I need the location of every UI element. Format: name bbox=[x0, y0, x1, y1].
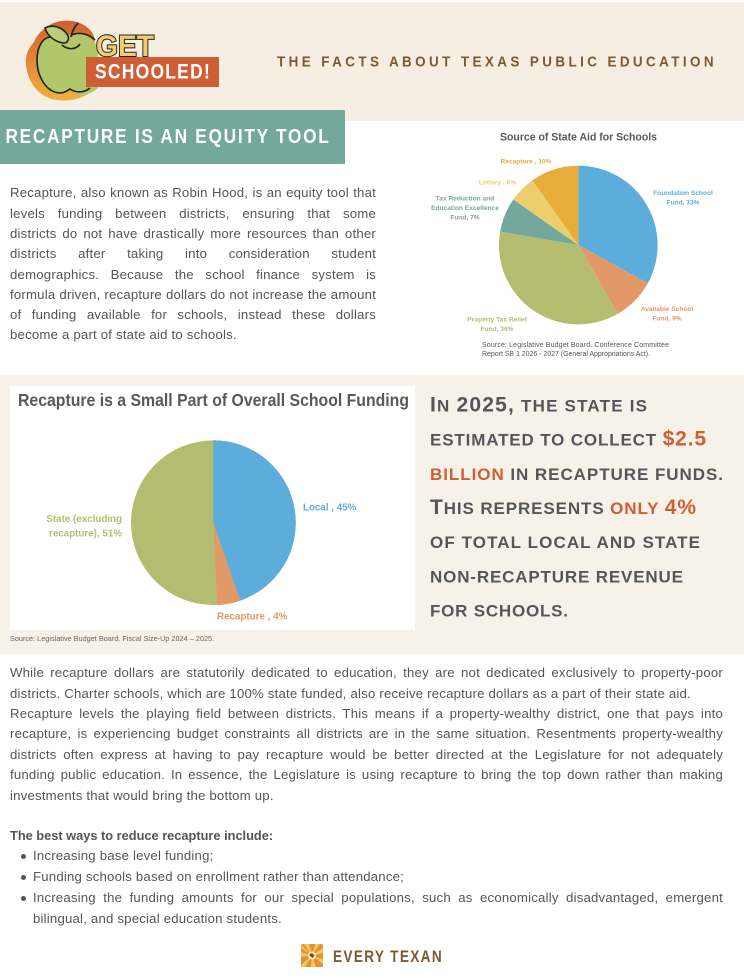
slice labels: Available School bbox=[641, 306, 693, 313]
pie chart: source of state aid bbox=[431, 132, 713, 358]
slice labels: Fund, 7% bbox=[450, 214, 480, 222]
body paragraph: Recapture levels the playing field between districts. This means if a property-wealthy district, one that pays into bbox=[10, 706, 723, 721]
callout: recapture revenue: OF TOTAL LOCAL AND STATE bbox=[430, 533, 700, 552]
callout: recapture revenue: THIS REPRESENTS ONLY 4% bbox=[430, 496, 696, 519]
slice labels: Fund, 9% bbox=[652, 316, 682, 322]
callout: recapture revenue: IN 2025, THE STATE IS bbox=[430, 394, 647, 417]
intro paragraph: levels funding between districts, ensuring that some bbox=[10, 206, 376, 220]
slice labels: Foundation School bbox=[653, 190, 713, 197]
callout: recapture revenue bbox=[430, 394, 723, 621]
intro paragraph: Recapture, also known as Robin Hood, is an equity tool that bbox=[10, 185, 376, 200]
slice labels bbox=[46, 502, 357, 622]
callout: recapture revenue: ESTIMATED TO COLLECT $2.5 bbox=[430, 428, 706, 451]
recommendations list: bilingual, and special education students. bbox=[33, 910, 282, 926]
slice labels: Education Excellence bbox=[431, 205, 499, 212]
slice labels: Recapture , 4% bbox=[217, 612, 288, 622]
panel: funding band bbox=[0, 375, 744, 654]
pie chart: overall school funding bbox=[10, 386, 415, 630]
chart source: Source: Legislative Budget Board. Conference Committee bbox=[482, 342, 669, 349]
recommendations list: Increasing base level funding; bbox=[33, 848, 213, 863]
slice labels: Fund, 36% bbox=[481, 326, 514, 333]
slice labels: Fund, 33% bbox=[667, 200, 700, 206]
slice labels: Property Tax Relief bbox=[467, 316, 528, 324]
body paragraph: districts often express at having to pay recapture would be better directed at the Legislature for not adequately bbox=[10, 746, 723, 762]
header band bbox=[0, 2, 744, 121]
chart source bbox=[482, 342, 669, 358]
body paragraph: investments that would bring the bottom up. bbox=[10, 788, 274, 802]
intro paragraph bbox=[10, 185, 376, 342]
callout: recapture revenue: NON-RECAPTURE REVENUE bbox=[430, 568, 683, 587]
slice labels: Tax Reduction and bbox=[436, 196, 494, 202]
callout: recapture revenue: BILLION IN RECAPTURE FUNDS. bbox=[430, 465, 723, 484]
body paragraph: funding public education. In essence, the Legislature is using recapture to bring the top down rather than making bbox=[10, 767, 723, 782]
slice labels bbox=[431, 158, 713, 333]
slice labels: Recapture , 10% bbox=[501, 158, 552, 166]
intro paragraph: districts do not have drastically more resources than other bbox=[10, 226, 376, 241]
pie slices bbox=[131, 440, 296, 605]
body paragraph bbox=[10, 665, 723, 802]
intro paragraph: of funding available for schools, instead these dollars bbox=[10, 307, 376, 322]
callout: recapture revenue: FOR SCHOOLS. bbox=[430, 602, 568, 621]
slice labels: State (excluding bbox=[46, 514, 122, 525]
slice labels: Lottery , 6% bbox=[479, 180, 516, 186]
recommendations list: Funding schools based on enrollment rather than attendance; bbox=[33, 869, 404, 884]
recommendations list: Increasing the funding amounts for our special populations, such as economically disadvantaged, emergent bbox=[33, 890, 723, 905]
intro paragraph: formula driven, recapture dollars do not increase the amount bbox=[10, 286, 376, 302]
body paragraph: While recapture dollars are statutorily dedicated to education, they are not dedicated exclusively to property-poor bbox=[10, 665, 723, 680]
subheading: best ways: The best ways to reduce recapture include: bbox=[10, 828, 273, 843]
chart source note: Source: Legislative Budget Board. Fiscal Size-Up 2024 – 2025. bbox=[10, 634, 214, 643]
icon: sun bbox=[301, 944, 323, 967]
body paragraph: recapture, is experiencing budget constraints all districts are in the same situation. Resentments property-wealthy bbox=[10, 726, 723, 741]
intro paragraph: become a part of state aid to schools. bbox=[10, 327, 237, 342]
footer logo: Every Texan bbox=[301, 944, 443, 967]
pie slices bbox=[499, 166, 658, 324]
title banner bbox=[0, 110, 345, 164]
slice labels: recapture), 51% bbox=[49, 528, 122, 540]
slice labels: Local , 45% bbox=[303, 502, 357, 514]
logo: Get Schooled apple bbox=[26, 20, 219, 100]
chart title: Source of State Aid for Schools bbox=[500, 132, 657, 144]
recommendations list bbox=[21, 848, 723, 926]
chart source: Report SB 1 2026 - 2027 (General Appropriations Act). bbox=[482, 351, 650, 358]
intro paragraph: demographics. Because the school finance system is bbox=[10, 266, 376, 282]
body paragraph: districts. Charter schools, which are 100% state funded, also receive recapture dollars as a part of their state aid. bbox=[10, 686, 691, 700]
logo: Get Schooled apple: GET bbox=[96, 30, 154, 63]
intro paragraph: districts after taking into consideration student bbox=[10, 246, 376, 261]
